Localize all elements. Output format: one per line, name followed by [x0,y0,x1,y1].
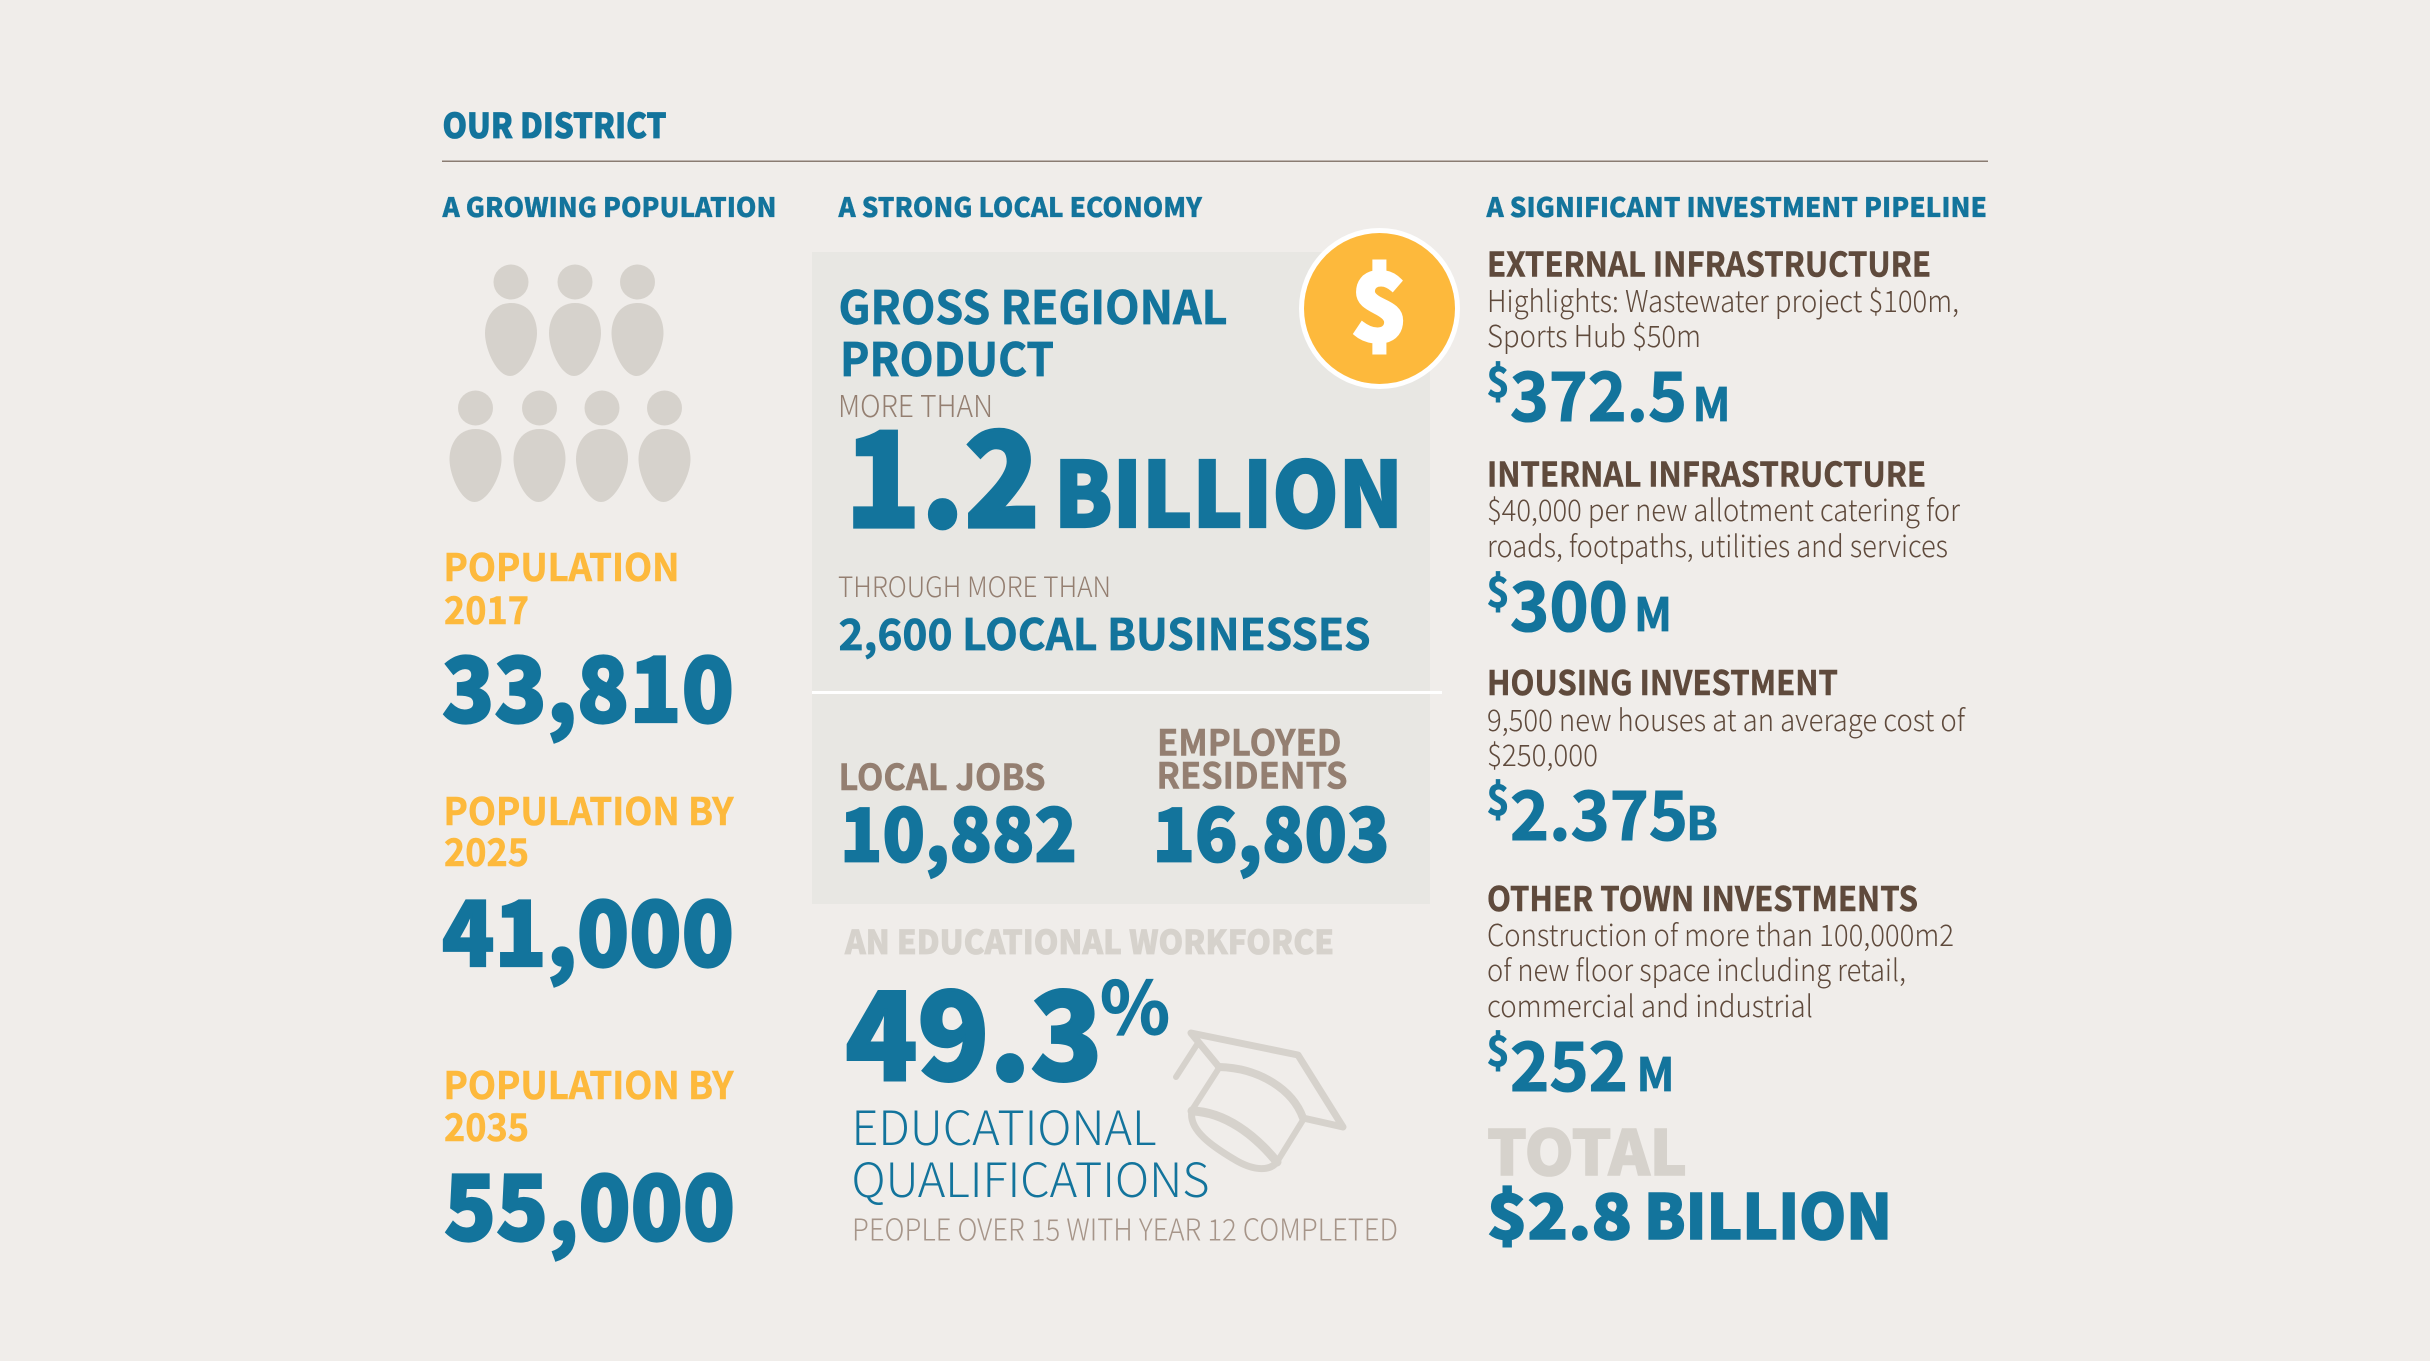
item: internal infrastructure: 300 [1510,552,1628,651]
item: external infrastructure: $ [1486,349,1510,410]
item: internal infrastructure: $ [1486,559,1510,620]
item: external infrastructure: EXTERNAL INFRASTRUCTURE [1487,238,1931,286]
gross regional product: BILLION [1054,423,1403,553]
item: other town investments: $ [1486,1018,1510,1079]
stat: population 2035 [444,1055,735,1266]
item: external infrastructure: M [1692,369,1730,435]
item: housing investment: 2.375 [1510,761,1688,860]
title: OUR DISTRICT [442,99,666,148]
item: other town investments: commercial and industrial [1487,982,1813,1026]
item: internal infrastructure: $40,000 per new allotment catering for [1487,486,1960,530]
stat: population 2025: 41,000 [442,862,734,992]
stat: population 2035: POPULATION BY [444,1055,734,1110]
item: external infrastructure: Highlights: Wastewater project $100m, [1487,277,1959,321]
local businesses [838,566,1370,663]
heading: educational workforce: AN EDUCATIONAL WORKFORCE [844,916,1334,964]
item: housing investment: $250,000 [1487,731,1598,775]
panel: educational workforce [844,916,1398,1250]
stat: employed residents [1152,714,1390,884]
icon: dollar coin [1299,228,1460,389]
stat: 49.3 percent: % [1100,950,1170,1055]
gross regional product: MORE THAN [838,382,993,426]
educational qualifications label: PEOPLE OVER 15 WITH YEAR 12 COMPLETED [852,1206,1398,1250]
icon: group of people [450,264,690,502]
stat: local jobs: LOCAL JOBS [838,749,1046,801]
item: other town investments: of new floor space including retail, [1487,946,1906,990]
item: housing investment: B [1686,788,1718,854]
stat: population 2025: 2025 [444,822,529,877]
heading: growing population: A GROWING POPULATION [442,186,776,225]
stat: population 2017: POPULATION [444,537,680,592]
panel: economy [812,186,1460,904]
item: housing investment [1486,656,1966,860]
item: housing investment: HOUSING INVESTMENT [1487,656,1838,705]
stat: population 2025 [442,781,734,992]
stat: population 2035: 2035 [444,1097,529,1152]
educational qualifications label: QUALIFICATIONS [852,1142,1210,1211]
stat: 49.3 percent: 49.3 [846,939,1102,1116]
stat: population 2017 [442,537,734,748]
icon: dollar coin: $ [1351,233,1408,369]
stat: population 2017: 33,810 [442,618,734,748]
stat: employed residents: EMPLOYED [1157,714,1342,766]
gross regional product: GROSS REGIONAL [838,272,1228,338]
icon: graduation cap [1176,1033,1343,1169]
heading: investment pipeline: A SIGNIFICANT INVESTMENT PIPELINE [1486,186,1987,225]
item: internal infrastructure: INTERNAL INFRASTRUCTURE [1487,448,1926,496]
item: housing investment: 9,500 new houses at an average cost of [1487,696,1966,740]
panel: investment pipeline [1486,186,1987,1257]
stat: population 2035: 55,000 [444,1136,735,1266]
item: other town investments: 252 [1510,1012,1628,1111]
item: external infrastructure [1486,238,1959,441]
stat: local jobs: 10,882 [840,776,1077,884]
local businesses: THROUGH MORE THAN [838,566,1111,606]
item: other town investments: OTHER TOWN INVESTMENTS [1487,872,1918,921]
total [1487,1103,1892,1257]
item: other town investments: M [1636,1039,1674,1105]
heading: strong local economy: A STRONG LOCAL ECONOMY [838,186,1203,225]
item: external infrastructure: Sports Hub $50m [1487,312,1701,356]
item: external infrastructure: 372.5 [1510,342,1687,441]
stat: employed residents: RESIDENTS [1156,748,1348,800]
item: housing investment: $ [1486,767,1510,828]
panel: population [442,186,776,1266]
item: internal infrastructure: roads, footpaths, utilities and services [1487,522,1948,566]
item: internal infrastructure [1486,448,1960,651]
stat: population 2017: 2017 [444,580,529,635]
gross regional product [838,272,1403,566]
total: BILLION [1644,1167,1892,1257]
local businesses: 2,600 LOCAL BUSINESSES [838,601,1370,663]
stat: employed residents: 16,803 [1152,776,1390,884]
total: TOTAL [1487,1103,1687,1193]
educational qualifications label: EDUCATIONAL [852,1090,1156,1159]
total: $2.8 [1487,1167,1632,1257]
gross regional product: PRODUCT [840,324,1054,390]
educational qualifications label [852,1090,1398,1250]
gross regional product: 1.2 [845,375,1040,566]
item: other town investments [1486,872,1954,1111]
item: internal infrastructure: M [1634,579,1672,645]
item: other town investments: Construction of more than 100,000m2 [1487,911,1954,955]
stat: population 2025: POPULATION BY [444,781,734,836]
panel background [812,252,1430,904]
